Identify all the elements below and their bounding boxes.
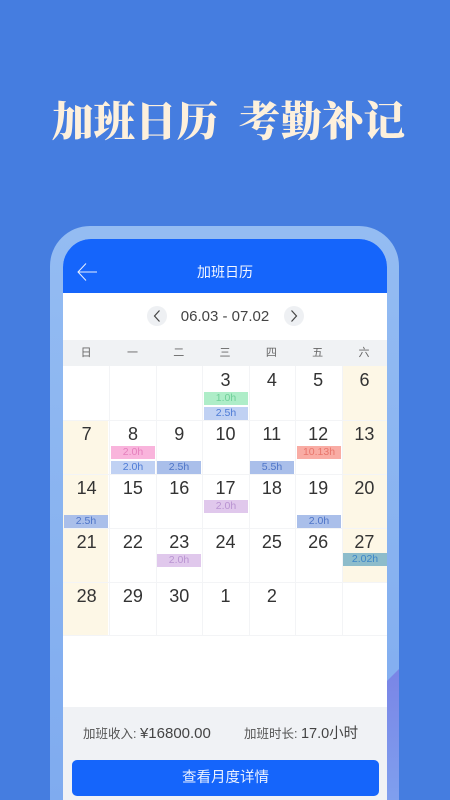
overtime tags: 2.5h — [76, 515, 96, 527]
calendar dates: 11 — [262, 424, 281, 444]
weekday labels: 日 — [81, 347, 92, 359]
weekday labels: 六 — [358, 347, 369, 359]
overtime tags: 10.13h — [303, 446, 335, 458]
calendar dates: 12 — [308, 424, 328, 444]
calendar dates: 15 — [123, 478, 143, 498]
date range: 06.03 - 07.02 — [181, 308, 269, 325]
calendar dates: 20 — [354, 478, 374, 498]
calendar dates: 14 — [77, 478, 97, 498]
calendar dates: 9 — [174, 424, 184, 444]
overtime hours: 加班时长: 17.0小时 — [244, 726, 358, 742]
calendar dates: 23 — [169, 532, 189, 552]
overtime tags: 5.5h — [262, 461, 282, 473]
header title: 加班日历 — [197, 264, 253, 280]
calendar dates: 13 — [354, 424, 374, 444]
calendar dates: 7 — [82, 424, 92, 444]
monthly details button: 查看月度详情 — [182, 770, 269, 786]
overtime income: 加班收入: ¥16800.00 — [83, 725, 211, 742]
calendar dates — [77, 370, 374, 606]
overtime tags: 2.5h — [216, 407, 236, 419]
overtime tags: 2.02h — [352, 553, 378, 565]
calendar dates: 5 — [313, 370, 323, 390]
calendar dates: 27 — [354, 532, 374, 552]
icon: back arrow — [77, 263, 97, 281]
overtime tags: 2.0h — [169, 554, 189, 566]
calendar dates: 26 — [308, 532, 328, 552]
weekend column shading — [63, 366, 387, 635]
calendar dates: 29 — [123, 586, 143, 606]
weekday header — [63, 340, 387, 366]
summary panel — [63, 707, 387, 800]
calendar dates: 25 — [262, 532, 282, 552]
weekday labels — [81, 346, 369, 359]
weekday labels: 五 — [312, 347, 323, 359]
weekday labels: 一 — [127, 347, 138, 359]
calendar dates: 10 — [216, 424, 236, 444]
calendar dates: 2 — [267, 586, 277, 606]
calendar dates: 4 — [267, 370, 277, 390]
monthly details button — [72, 760, 379, 796]
title: left part: 加班日历 — [52, 99, 218, 145]
calendar dates: 8 — [128, 424, 138, 444]
weekday labels: 三 — [220, 347, 231, 359]
overtime tags: 2.0h — [309, 515, 329, 527]
phone frame — [50, 226, 399, 800]
icon: previous circle — [147, 306, 167, 326]
calendar dates: 3 — [221, 370, 231, 390]
calendar dates: 22 — [123, 532, 143, 552]
overtime tags: 2.5h — [169, 461, 189, 473]
calendar dates: 21 — [77, 532, 97, 552]
overtime tags: 1.0h — [216, 392, 236, 404]
title: right part: 考勤补记 — [239, 99, 405, 145]
calendar dates: 1 — [221, 586, 231, 606]
frame accent: violet corner — [387, 669, 399, 800]
overtime tags: 2.0h — [123, 446, 143, 458]
calendar dates: 18 — [262, 478, 282, 498]
calendar dates: 6 — [359, 370, 369, 390]
overtime tags: 2.0h — [216, 500, 236, 512]
calendar dates: 30 — [169, 586, 189, 606]
date navigation — [147, 306, 304, 326]
weekday labels: 四 — [266, 347, 277, 359]
phone screen — [63, 239, 387, 800]
app header bar — [63, 239, 387, 293]
calendar dates: 17 — [216, 478, 236, 498]
overtime tags — [64, 392, 387, 567]
calendar dates: 16 — [169, 478, 189, 498]
icon: next circle — [284, 306, 304, 326]
overtime tags: 2.0h — [123, 461, 143, 473]
weekday labels: 二 — [173, 347, 184, 359]
calendar dates: 19 — [308, 478, 328, 498]
calendar dates: 28 — [77, 586, 97, 606]
calendar dates: 24 — [216, 532, 236, 552]
